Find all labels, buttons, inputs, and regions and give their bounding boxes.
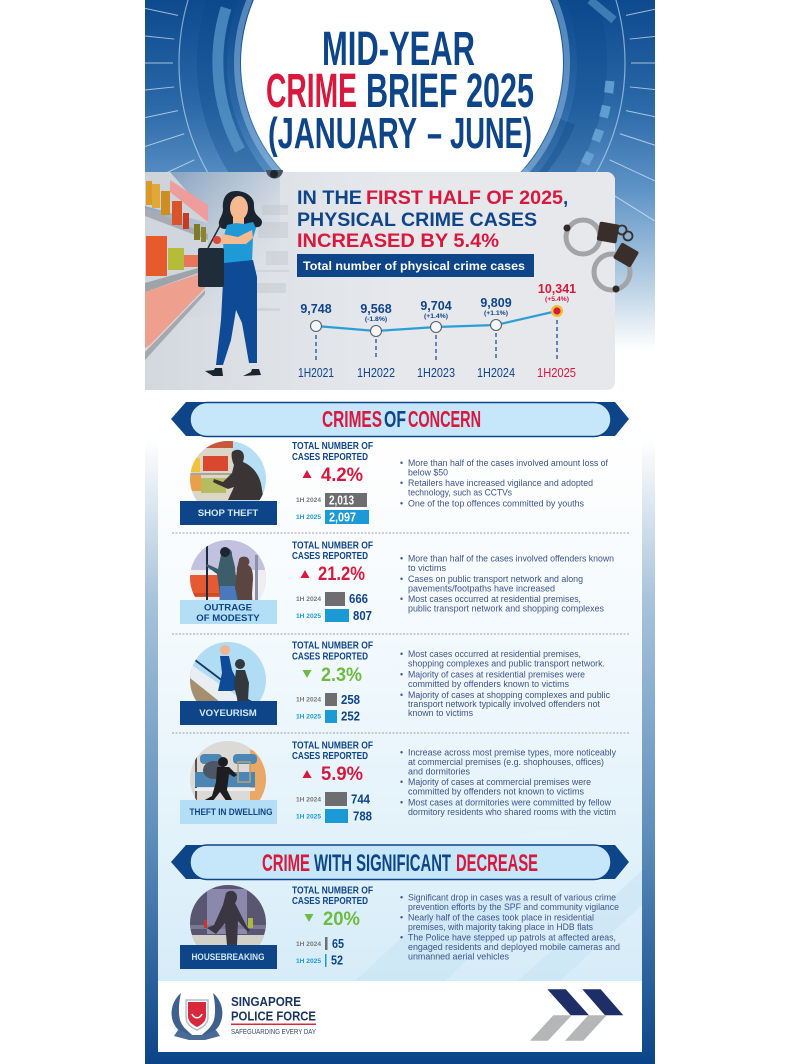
bullet points: Majority of cases at shopping complexes and public: [408, 690, 611, 700]
bullet points: Significant drop in cases was a result of various crime: [408, 892, 616, 902]
category label: OF MODESTY: [196, 613, 260, 624]
header background with concentric rings: [145, 0, 655, 342]
title: –: [427, 109, 442, 158]
heading: total cases: CASES REPORTED: [292, 452, 368, 463]
change: up 5.9%: 5.9%: [321, 764, 363, 785]
infographic: [145, 0, 655, 1064]
title: [266, 23, 534, 158]
headline: INCREASED BY 5.4%: [297, 231, 499, 252]
bullet points: and dormitories: [408, 766, 471, 776]
bullet points: shopping complexes and public transport network.: [408, 658, 605, 668]
bullet points: •: [400, 670, 403, 680]
bullet points: Most cases occurred at residential premises,: [408, 594, 581, 604]
bullet points: premises, with majority taking place in HDB flats: [408, 922, 594, 932]
icon: handcuffs: [564, 220, 639, 292]
icon: woman shopping: [198, 191, 262, 376]
bullet points: Majority of cases at residential premises were: [408, 670, 585, 680]
bullet points: pavements/footpaths have increased: [408, 584, 555, 594]
line chart: 1H2025: [537, 366, 576, 380]
bars: 1H 2024: [296, 596, 321, 603]
category label: VOYEURISM: [199, 708, 257, 719]
bullet points: •: [400, 594, 403, 604]
bullet points: known to victims: [408, 708, 474, 718]
panel: voyeurism: [180, 640, 611, 725]
bullet points: One of the top offences committed by youths: [408, 498, 585, 508]
heading: total cases: TOTAL NUMBER OF: [292, 540, 373, 552]
bullet points: [400, 458, 609, 508]
bullet points: Cases on public transport network and along: [408, 574, 583, 584]
bullet points: prevention efforts by the SPF and community vigilance: [408, 902, 619, 912]
bullet points: The Police have stepped up patrols at affected areas,: [408, 932, 616, 942]
bars: [296, 693, 360, 724]
subheading bar: Total number of physical crime cases: [303, 261, 525, 273]
bullet points: to victims: [408, 563, 447, 573]
bullet points: below $50: [408, 468, 448, 478]
bullet points: committed by offenders known to victims: [408, 679, 570, 689]
heading: total cases: CASES REPORTED: [292, 751, 368, 762]
bullet points: Nearly half of the cases took place in residential: [408, 912, 594, 922]
heading: total cases: CASES REPORTED: [292, 551, 368, 562]
panel: housebreaking: [180, 885, 620, 969]
heading: total cases: [292, 886, 373, 907]
banner: crimes of concern: CRIMES: [322, 406, 382, 432]
category label: [180, 501, 277, 525]
footer logo: police crest: [172, 993, 222, 1040]
category label: OUTRAGE: [204, 602, 253, 614]
line chart: 9,704: [420, 299, 452, 313]
heading: total cases: [292, 740, 373, 762]
bullet points: •: [400, 798, 403, 808]
bullet points: •: [400, 554, 403, 564]
bullet points: •: [400, 748, 403, 758]
footer text: SAFEGUARDING EVERY DAY: [231, 1027, 316, 1036]
bullet points: •: [400, 478, 403, 488]
bars: 1H 2025: [296, 714, 321, 720]
banner: crimes of concern: OF: [384, 406, 406, 432]
bullet points: [400, 892, 620, 962]
icon: housebreaking: [190, 885, 266, 945]
bullet points: engaged residents and deployed mobile cameras and: [408, 942, 620, 952]
bullet points: •: [400, 498, 403, 508]
change: up 21.2%: 21.2%: [318, 564, 365, 585]
bullet points: dormitory residents who shared rooms with the victim: [408, 807, 616, 817]
bullet points: •: [400, 458, 403, 468]
bars: 744: [351, 792, 370, 806]
bars: 1H 2024: [296, 497, 321, 504]
panel: theft in dwelling: [180, 740, 617, 824]
bars: 1H 2025: [296, 613, 321, 620]
bars: 807: [353, 609, 372, 623]
line chart: 9,748: [300, 302, 332, 316]
bullet points: •: [400, 912, 403, 922]
line chart: (-1.8%): [365, 316, 387, 323]
bars: 1H 2025: [296, 514, 321, 521]
icon: theft in dwelling: [190, 741, 266, 800]
bars: 252: [341, 710, 360, 724]
bullet points: technology, such as CCTVs: [408, 488, 513, 498]
subheading bar: [297, 254, 534, 277]
footer text: SINGAPORE: [231, 994, 301, 1009]
line chart: 1H2021: [298, 366, 334, 380]
category label: SHOP THEFT: [198, 508, 258, 519]
category label: [180, 701, 277, 725]
line chart: (+5.4%): [545, 296, 569, 303]
heading: total cases: [292, 441, 373, 463]
bullet points: Most cases occurred at residential premises,: [408, 649, 581, 659]
heading: total cases: CASES REPORTED: [292, 652, 368, 662]
bars: [296, 592, 372, 623]
banner: crime with significant decrease: DECREASE: [456, 850, 538, 877]
heading: total cases: CASES REPORTED: [292, 896, 368, 907]
headline: FIRST HALF OF 2025: [366, 188, 563, 209]
headline: PHYSICAL CRIME CASES: [297, 210, 537, 231]
bullet points: [400, 748, 617, 817]
banner: crimes of concern: CONCERN: [408, 406, 481, 432]
icon: voyeurism: [190, 642, 266, 701]
bullet points: Most cases at dormitories were committed by fellow: [408, 798, 612, 808]
banner: crime with significant decrease: CRIME: [262, 850, 310, 877]
bars: [296, 493, 369, 524]
bars: 258: [341, 693, 360, 707]
category label: [180, 945, 277, 969]
bars: [296, 937, 344, 968]
bullet points: •: [400, 574, 403, 584]
bullet points: More than half of the cases involved offenders known: [408, 554, 614, 564]
heading: total cases: TOTAL NUMBER OF: [292, 640, 373, 652]
change: up 5.9%: [302, 764, 363, 785]
bars: 1H 2025: [296, 814, 321, 820]
title: (JANUARY: [268, 109, 417, 158]
heading: total cases: TOTAL NUMBER OF: [292, 441, 373, 452]
bullet points: More than half of the cases involved amount loss of: [408, 458, 609, 468]
line chart: 10,341: [538, 282, 576, 296]
bars: 1H 2024: [296, 796, 321, 804]
bullet points: •: [400, 777, 403, 787]
bullet points: transport network typically involved offenders not: [408, 699, 601, 709]
heading: total cases: TOTAL NUMBER OF: [292, 740, 373, 752]
bars: 1H 2024: [296, 941, 321, 948]
headline: ,: [563, 188, 568, 209]
bars: 2,013: [329, 494, 354, 508]
line chart: [298, 282, 576, 380]
line chart: 1H2023: [417, 366, 455, 380]
banner: crimes of concern: [171, 402, 629, 436]
line chart: 9,809: [480, 296, 512, 310]
bullet points: •: [400, 690, 403, 700]
category label: [180, 600, 277, 624]
title: CRIME: [266, 65, 357, 118]
bullet points: Retailers have increased vigilance and adopted: [408, 478, 593, 488]
bullet points: committed by offenders not known to victims: [408, 786, 585, 796]
bullet points: •: [400, 932, 403, 942]
bullet points: •: [400, 649, 403, 659]
change: down 20%: [304, 909, 360, 930]
title: MID-YEAR: [322, 23, 475, 76]
title: BRIEF 2025: [366, 65, 534, 118]
category label: HOUSEBREAKING: [192, 952, 264, 963]
change: down 2.3%: 2.3%: [321, 665, 362, 686]
line chart: (+1.1%): [484, 310, 508, 317]
bullet points: [400, 649, 611, 718]
panel: physical crime cases: [145, 170, 639, 390]
headline: [297, 188, 568, 252]
line chart: 1H2024: [477, 366, 515, 380]
bars: 1H 2025: [296, 958, 321, 965]
change: up 4.2%: [302, 465, 363, 486]
change: down 20%: 20%: [323, 909, 360, 930]
bars: 2,097: [329, 510, 356, 524]
icon: shop theft: [190, 441, 266, 501]
banner: crime with significant decrease: [171, 845, 629, 880]
change: up 21.2%: [300, 564, 365, 585]
title: JUNE): [450, 109, 532, 158]
line chart: 9,568: [360, 302, 392, 316]
bullet points: unmanned aerial vehicles: [408, 952, 510, 962]
line chart: 1H2022: [357, 366, 395, 380]
icon: outrage of modesty: [190, 540, 266, 600]
change: down 2.3%: [302, 665, 362, 686]
footer text: POLICE FORCE: [231, 1008, 316, 1024]
banner: crime with significant decrease: WITH SIGNIFICANT: [314, 850, 451, 877]
bullet points: Increase across most premise types, more noticeably: [408, 748, 617, 758]
shelves in back: [256, 205, 289, 311]
lower frame background: [145, 436, 655, 1064]
footer text: [231, 994, 316, 1036]
bullet points: [400, 554, 614, 614]
category label: THEFT IN DWELLING: [190, 807, 272, 818]
bars: 1H 2024: [296, 696, 321, 704]
supermarket shelves: [145, 172, 289, 360]
bars: [296, 792, 372, 824]
bars: 52: [331, 954, 343, 968]
bullet points: •: [400, 892, 403, 902]
heading: total cases: TOTAL NUMBER OF: [292, 886, 373, 896]
heading: total cases: [292, 640, 373, 662]
bullet points: public transport network and shopping complexes: [408, 604, 605, 614]
bars: 788: [353, 810, 372, 824]
bullet points: at commercial premises (e.g. shophouses, offices): [408, 757, 604, 767]
panel: shop theft: [180, 441, 609, 525]
category label: [180, 800, 277, 824]
bullet points: Majority of cases at commercial premises were: [408, 777, 591, 787]
footer chevrons: [530, 989, 623, 1041]
headline: IN THE: [297, 188, 362, 209]
change: up 4.2%: 4.2%: [321, 465, 363, 486]
bars: 65: [332, 937, 344, 951]
heading: total cases: [292, 540, 373, 562]
line chart: (+1.4%): [424, 313, 448, 320]
bars: 666: [349, 592, 368, 606]
icon: cctv camera: [266, 170, 283, 178]
panel: outrage of modesty: [180, 540, 614, 624]
